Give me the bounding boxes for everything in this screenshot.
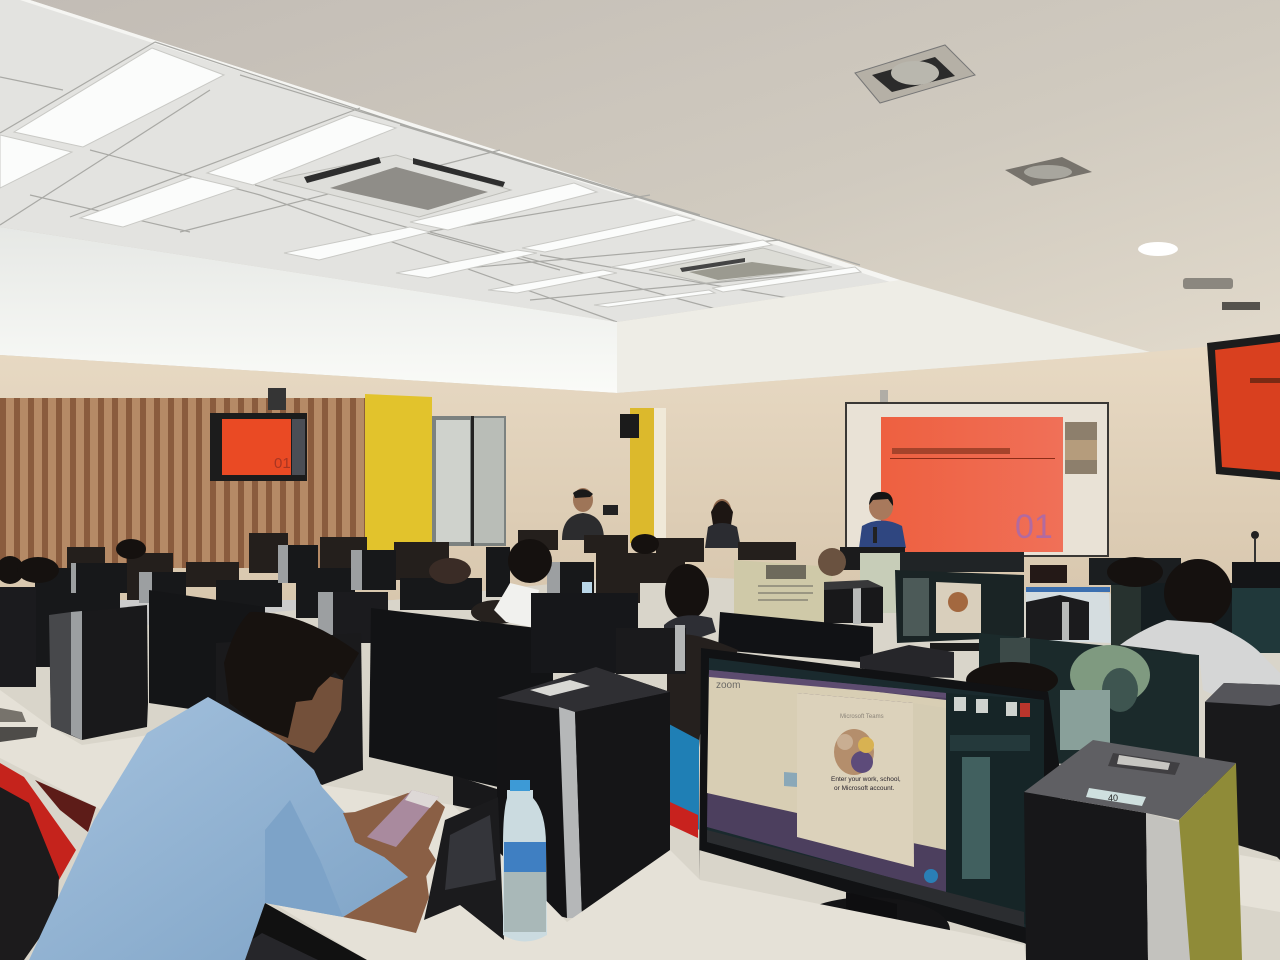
person: presenter with microphone: [859, 492, 906, 548]
label with number: [1086, 788, 1146, 806]
front right monitor with zoom: [699, 648, 1060, 960]
video inset: [1065, 422, 1097, 474]
zoom window: Microsoft Teams: [840, 714, 884, 720]
desks: [0, 575, 1280, 960]
document monitor: [734, 560, 834, 622]
yellow column left: [365, 394, 432, 560]
tower behind document monitor: [824, 580, 883, 624]
tower behind screen: [860, 645, 954, 678]
neck and face: [240, 655, 343, 753]
zoom window: or Microsoft account.: [834, 785, 895, 792]
red chair: [0, 763, 76, 880]
webcam on post: [1251, 531, 1259, 564]
right rear rows of monitors: [718, 547, 1280, 770]
zoom window: [707, 670, 946, 893]
person: camera operator: [562, 488, 618, 540]
air conditioner cassette large: [273, 155, 511, 217]
projected slide: [881, 417, 1063, 552]
wall tv left: [210, 388, 307, 481]
monitor stand: [790, 892, 950, 960]
dark monitor middle row: [718, 612, 873, 663]
small water bottle: [582, 582, 592, 598]
wallpaper monitor large: [979, 633, 1199, 770]
zoom window: zoom: [716, 680, 740, 691]
woman with ponytail body: [664, 615, 716, 650]
white soffit: [0, 227, 1150, 393]
monitor behind student: [149, 590, 265, 720]
wall tv left: 01: [274, 455, 291, 472]
downlights on ceiling: [855, 45, 1260, 310]
seated students rear: [0, 534, 1280, 838]
man in white hoodie: [1120, 620, 1280, 700]
label with number: 40: [1108, 793, 1118, 803]
plain upper ceiling: [0, 0, 1280, 400]
front desk and chair: [0, 690, 1026, 960]
hair: [224, 612, 359, 738]
illustration: people: [834, 729, 874, 775]
shirt: [29, 697, 408, 960]
left tower: [49, 605, 148, 740]
large central monitor: [369, 608, 553, 795]
tablet on desk: [0, 708, 26, 722]
tower computer front right: [1024, 740, 1242, 960]
air conditioner cassette small: [649, 248, 832, 283]
glass door: [432, 416, 506, 546]
keyboard: [241, 933, 318, 960]
back wall: [0, 340, 1280, 600]
projected slide: 01: [1015, 508, 1053, 546]
zoom window: Enter your work, school,: [831, 776, 901, 783]
monitor stand centre: [453, 775, 500, 815]
yellow column right: [630, 408, 666, 543]
ceiling light fixtures: [0, 48, 861, 307]
person: woman: [705, 499, 741, 548]
monitor with wallpaper and modal: [895, 570, 1024, 651]
desktop wallpaper columns and icons: [946, 693, 1044, 930]
boy in white shirt: [494, 583, 539, 627]
tower partial centre right: [616, 628, 686, 674]
tower computer centre: [497, 667, 670, 918]
projector: [868, 390, 908, 416]
phone: [367, 790, 439, 847]
presenters: [562, 488, 906, 548]
forearm and hands: [343, 793, 445, 933]
desk underside: [35, 780, 96, 832]
student in blue shirt: [29, 612, 445, 960]
left middle monitors and towers: [49, 590, 686, 815]
wall speaker: [620, 414, 639, 438]
projection screen: [846, 403, 1108, 556]
tower behind student: [216, 633, 363, 785]
white window monitor: [1026, 587, 1111, 643]
monitor middle centre: [531, 593, 638, 673]
woman in blue: [667, 634, 738, 838]
right desk edge: [1240, 855, 1280, 912]
tower computer far right: [1205, 683, 1280, 860]
wood slat wall: [0, 398, 365, 568]
black bag: [424, 797, 504, 940]
tiled ceiling panel: [0, 0, 900, 322]
rear rows of monitors and computers: [0, 530, 796, 687]
water bottle: [503, 780, 547, 942]
wall tv right: [1207, 334, 1280, 480]
